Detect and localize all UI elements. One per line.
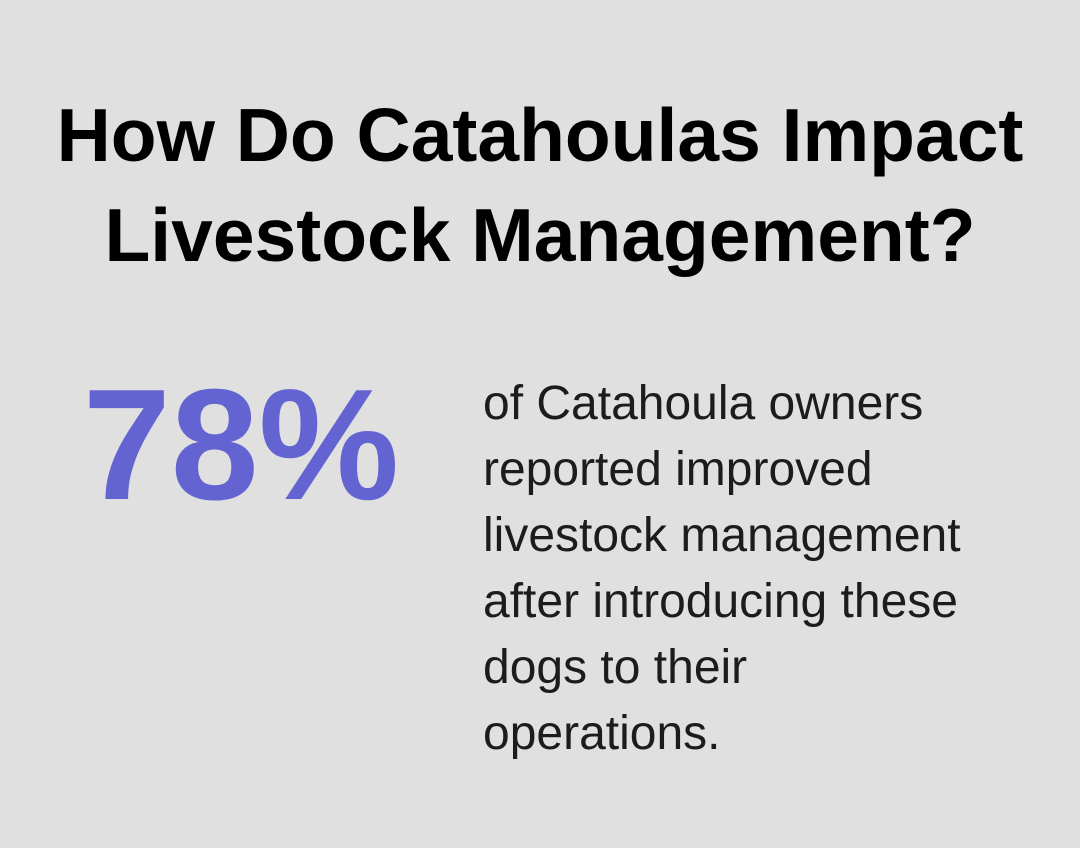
description text: reported improved: [483, 443, 873, 496]
description text: operations.: [483, 707, 720, 760]
description text: livestock management: [483, 509, 961, 562]
title: How Do Catahoulas Impact: [57, 93, 1023, 177]
statistic: 78%: 78%: [83, 357, 399, 533]
description text: dogs to their: [483, 641, 747, 694]
title: Livestock Management?: [104, 193, 976, 277]
title: [57, 93, 1023, 277]
description text: [483, 377, 961, 760]
description text: of Catahoula owners: [483, 377, 923, 430]
description text: after introducing these: [483, 575, 958, 628]
